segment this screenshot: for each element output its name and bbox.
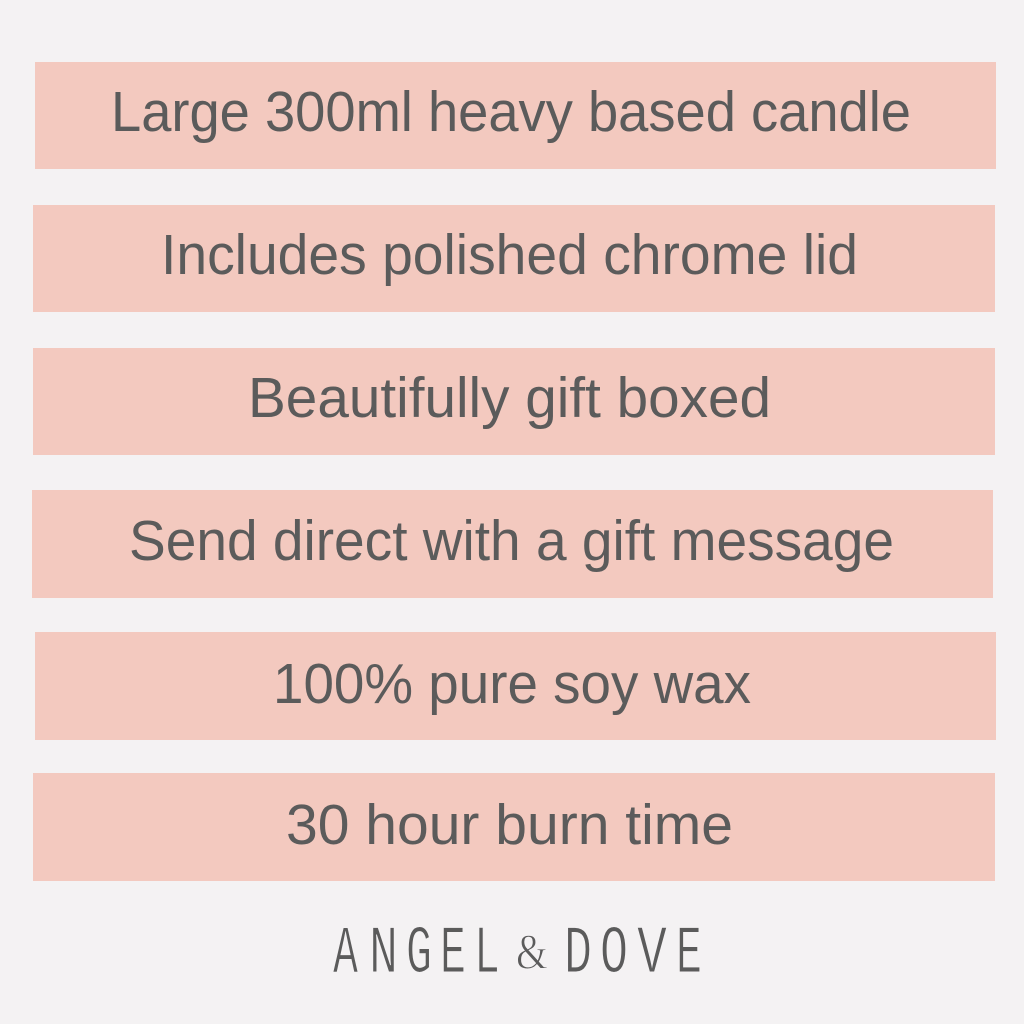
brand logo (333, 916, 702, 993)
brand logo: L (474, 916, 500, 993)
brand logo: G (406, 916, 432, 993)
feature bar: burn time (33, 773, 995, 881)
feature bar: gift message (32, 490, 993, 598)
brand logo: O (600, 916, 628, 993)
feature bar: soy wax (35, 632, 996, 740)
feature bar: large candle (35, 62, 996, 169)
feature bar: large candle: Large 300ml heavy based candle (111, 80, 911, 144)
feature bar: gift boxed: Beautifully gift boxed (248, 366, 771, 430)
brand logo: E (676, 916, 702, 993)
brand logo: D (564, 916, 592, 993)
brand logo: E (440, 916, 466, 993)
feature bar: gift boxed (33, 348, 995, 455)
brand logo: N (369, 916, 398, 993)
feature bar: gift message: Send direct with a gift message (129, 509, 894, 573)
feature bar: burn time: 30 hour burn time (286, 793, 733, 857)
feature bar: chrome lid (33, 205, 995, 312)
brand logo: & (516, 923, 548, 979)
brand logo: V (637, 916, 667, 993)
feature bar: chrome lid: Includes polished chrome lid (161, 223, 858, 287)
feature bar: soy wax: 100% pure soy wax (273, 652, 751, 716)
brand logo: A (333, 916, 358, 993)
